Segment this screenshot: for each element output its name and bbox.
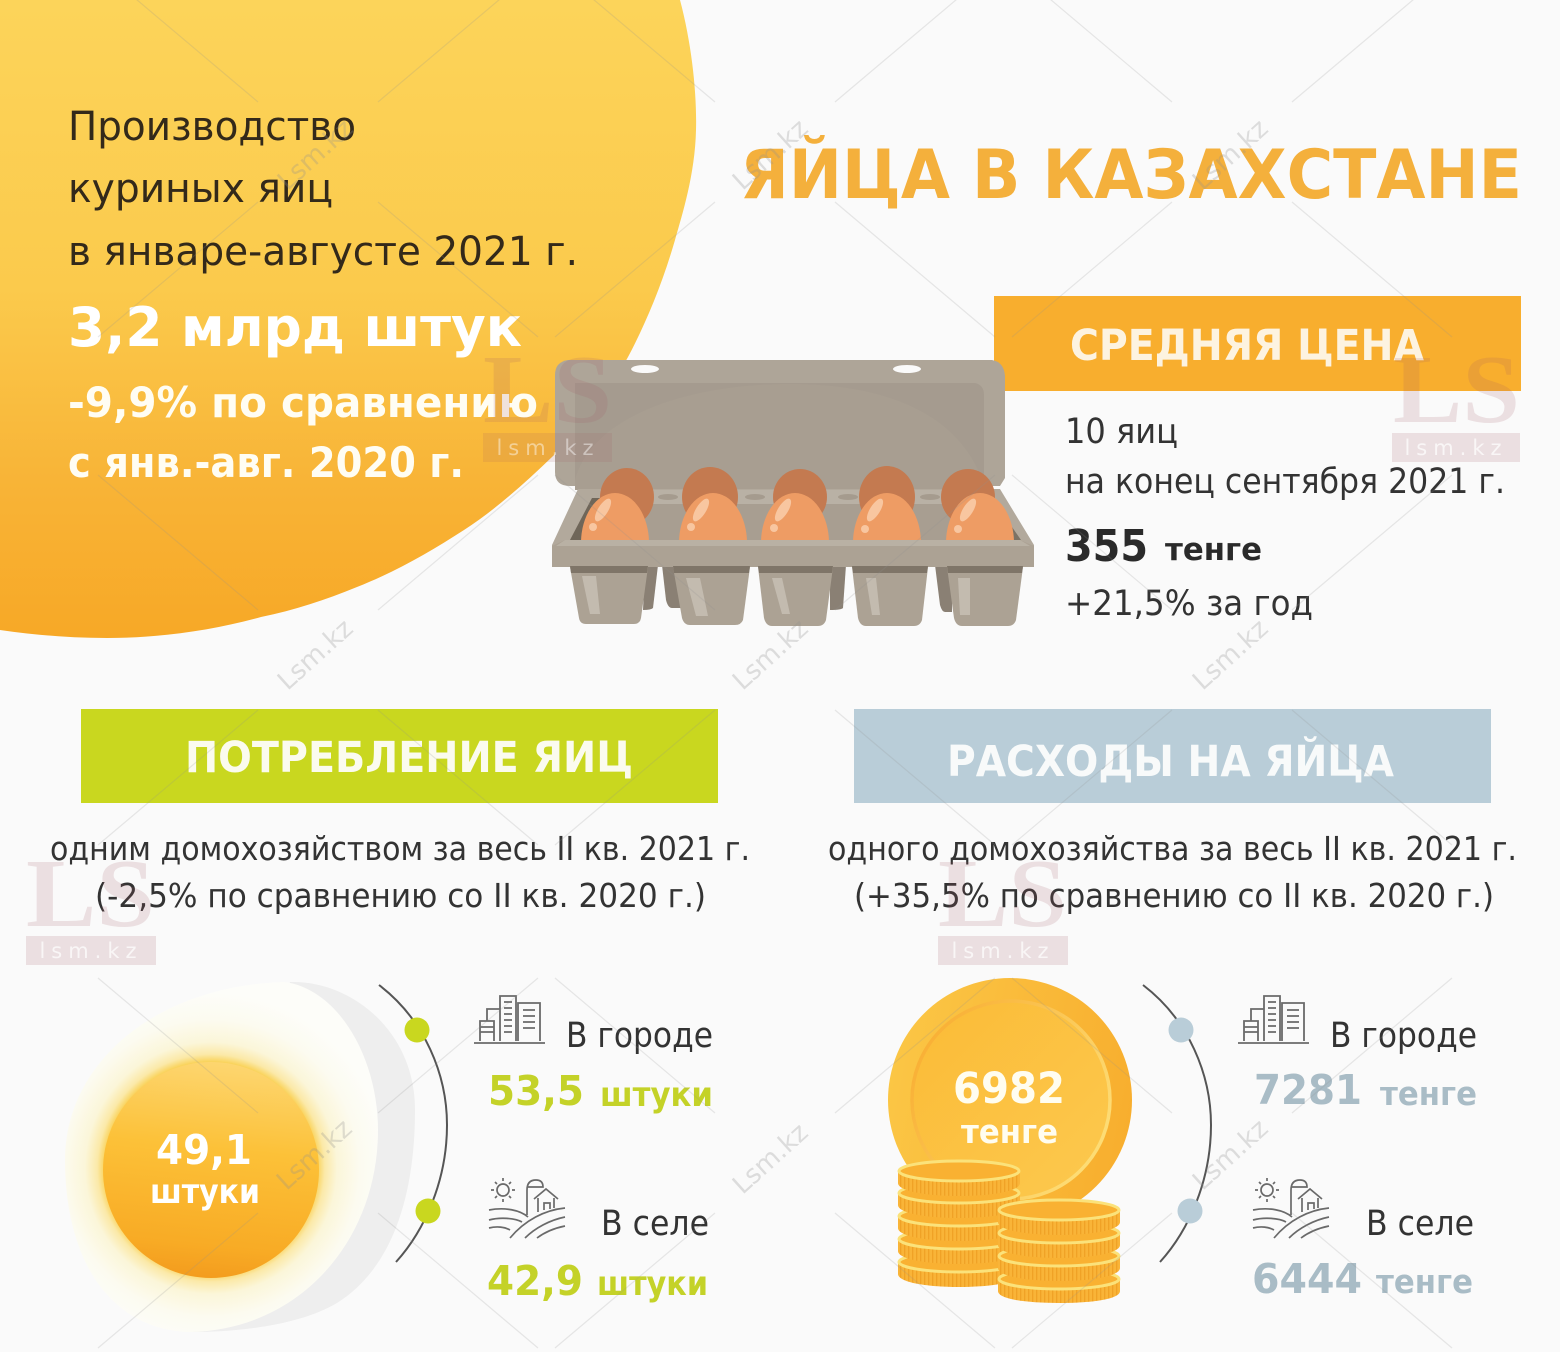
cup shadows [570,566,1023,573]
left coin stack [898,1161,1020,1287]
average price description: 10 яиц [1065,412,1178,452]
watermark logo: LS [938,840,1067,948]
production change [68,378,538,487]
average price description: на конец сентября 2021 г. [1065,462,1505,502]
carton tray [552,489,1034,567]
watermark logo: lsm.kz [951,939,1055,963]
average price header: СРЕДНЯЯ ЦЕНА [1070,321,1425,371]
consumption header [81,709,718,803]
right coin stack [998,1200,1120,1303]
watermark logo: lsm.kz [1404,436,1508,460]
rural value: 42,9 [487,1257,583,1305]
tray rim [552,540,1034,567]
watermark lattice: Lsm.kz [1187,114,1274,196]
watermark lattice: Lsm.kz [272,614,359,696]
panel: consumption [50,709,750,1332]
panel: expenses [828,709,1517,1303]
production heading [68,104,578,275]
title: ЯЙЦА В КАЗАХСТАНЕ [740,135,1522,215]
consumption header: ПОТРЕБЛЕНИЕ ЯИЦ [185,733,633,783]
icon: village [489,1178,565,1238]
watermark lattice: Lsm.kz [727,1118,814,1200]
average price header [994,296,1521,391]
consumption description: одним домохозяйством за весь II кв. 2021 г. [50,829,750,868]
urban value [1254,1066,1477,1114]
rural label: В селе [601,1204,709,1244]
production value: 3,2 млрд штук [68,296,522,359]
watermark logo: LS [483,336,612,444]
watermark logo: LS [26,840,155,948]
average price description [1065,412,1505,502]
back eggs [600,466,995,528]
urban value [488,1067,713,1115]
production change: с янв.-авг. 2020 г. [68,438,464,487]
watermark lattice: Lsm.kz [727,614,814,696]
expenses header: РАСХОДЫ НА ЯЙЦА [947,736,1395,787]
watermark lattice: Lsm.kz [727,114,814,196]
watermark logo: LS [1393,336,1520,444]
watermark lattice: Lsm.kz [271,1114,358,1196]
urban value: тенге [1380,1074,1477,1113]
icon: boiled egg [65,982,415,1332]
consumption description [50,829,750,915]
panel: average price [994,296,1521,624]
urban value: 7281 [1254,1066,1362,1114]
rural value: тенге [1376,1262,1473,1301]
expenses header [854,709,1491,803]
front cups [570,567,1023,626]
expenses description [828,829,1517,915]
big coin: тенге [961,1112,1058,1151]
rural value [487,1257,708,1305]
rural label: В селе [1366,1204,1474,1244]
cup highlights [582,576,970,616]
rural value: штуки [597,1264,708,1304]
big coin [888,978,1132,1222]
carton lid [555,360,1005,490]
watermark lattice: Lsm.kz [272,114,359,196]
urban label: В городе [566,1016,713,1056]
connector arc [1143,985,1211,1262]
average price value [1065,521,1262,572]
icon: village [1253,1178,1329,1238]
watermark logo: lsm.kz [496,436,600,460]
yellow sun shape [0,0,696,638]
average price change: +21,5% за год [1065,584,1313,624]
icon: egg carton [552,360,1034,626]
back cups [643,565,952,612]
icon: city [474,996,545,1043]
urban value: 53,5 [488,1067,584,1115]
production heading: куриных яиц [68,166,333,212]
icon: boiled egg: 49,1 [156,1126,252,1174]
icon: boiled egg: штуки [150,1172,260,1212]
production heading: Производство [68,104,356,150]
average price value: 355 [1065,521,1148,572]
watermark lattice: Lsm.kz [1187,614,1274,696]
production heading: в январе-августе 2021 г. [68,229,578,275]
production change: -9,9% по сравнению [68,378,538,427]
big coin: 6982 [953,1064,1065,1114]
connector arc [379,985,447,1262]
rural value: 6444 [1252,1255,1362,1303]
average price value: тенге [1165,532,1262,568]
urban label: В городе [1330,1016,1477,1056]
icon: coins [888,978,1132,1303]
urban value: штуки [600,1075,713,1115]
front eggs [581,493,1014,540]
expenses description: (+35,5% по сравнению со II кв. 2020 г.) [854,876,1494,915]
rural value [1252,1255,1473,1303]
icon: city [1238,996,1309,1043]
watermark lattice: Lsm.kz [1187,1114,1274,1196]
consumption description: (-2,5% по сравнению со II кв. 2020 г.) [95,876,706,915]
watermark logo: lsm.kz [39,939,143,963]
panel: production [68,104,578,487]
